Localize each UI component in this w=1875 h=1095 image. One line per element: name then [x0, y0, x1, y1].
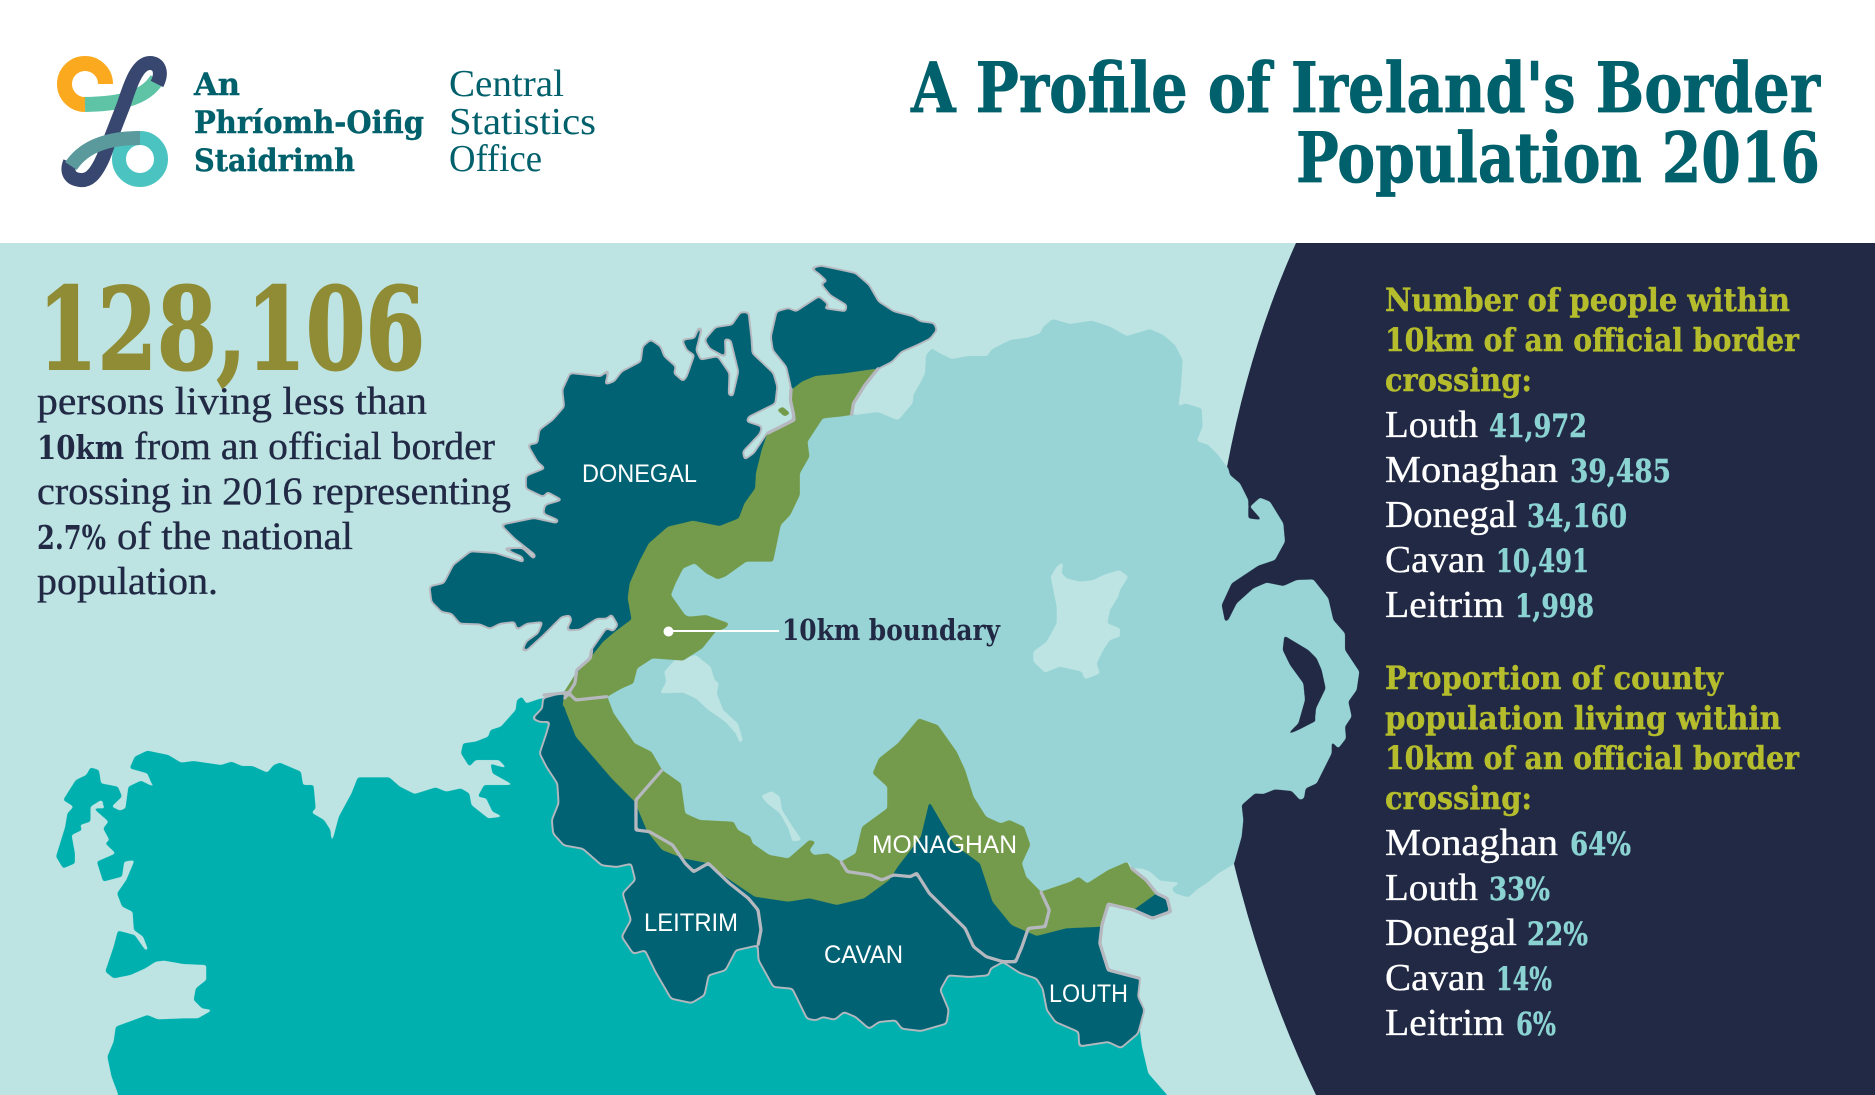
- list: number of people by county: 10,491: [1496, 542, 1589, 580]
- Northern Ireland landmass: [586, 319, 1359, 907]
- list: number of people by county: 41,972: [1489, 407, 1587, 445]
- 10km boundary band: [563, 368, 1157, 936]
- callout: 10km boundary: [664, 613, 1001, 647]
- list: number of people by county: Monaghan: [1385, 449, 1558, 491]
- list: number of people by county: Leitrim: [1385, 584, 1504, 626]
- logo text: English name: Office: [449, 138, 542, 180]
- heading: proportion of county: population living within: [1385, 699, 1781, 737]
- heading: proportion of county: 10km of an official border: [1385, 739, 1800, 777]
- panel: number of people: [1385, 281, 1800, 626]
- stat description: 10km: [37, 428, 124, 467]
- logo symbol: [64, 63, 161, 180]
- title: [910, 48, 1821, 199]
- list: proportion by county: Cavan: [1385, 957, 1485, 999]
- list: proportion by county: Donegal: [1385, 912, 1517, 954]
- heading: proportion of county: Proportion of county: [1385, 659, 1724, 697]
- stat description: from an official border: [134, 425, 495, 468]
- logo text: Irish name: An: [193, 67, 240, 103]
- logo text: English name: Central: [449, 63, 564, 105]
- county label: Monaghan: MONAGHAN: [872, 831, 1017, 859]
- logo text: English name: [449, 63, 596, 180]
- headline stat: 128,106: [38, 263, 425, 396]
- stat description: persons living less than: [37, 380, 427, 423]
- logo text: Irish name: Phríomh-Oifig: [194, 105, 424, 141]
- list: proportion by county: Monaghan: [1385, 822, 1558, 864]
- list: number of people by county: 34,160: [1527, 497, 1627, 535]
- list: number of people by county: Louth: [1385, 404, 1478, 446]
- list: number of people by county: Cavan: [1385, 539, 1485, 581]
- heading: proportion of county: [1385, 659, 1800, 817]
- callout: 10km boundary: 10km boundary: [782, 613, 1001, 647]
- panel: proportion of county: [1385, 659, 1800, 1044]
- county label: Louth: LOUTH: [1049, 980, 1128, 1008]
- list: proportion by county: 14%: [1496, 960, 1552, 998]
- heading: number of people: [1385, 281, 1800, 399]
- Lough Erne lakes: [660, 655, 802, 842]
- heading: number of people: crossing:: [1385, 361, 1532, 399]
- list: number of people by county: [1385, 404, 1671, 626]
- county label: Cavan: CAVAN: [824, 941, 903, 969]
- map: [56, 266, 1359, 1095]
- stat description: crossing in 2016 representing: [37, 470, 511, 513]
- stat description: of the national: [117, 515, 353, 558]
- list: number of people by county: 1,998: [1515, 587, 1594, 625]
- Leitrim, Cavan, Monaghan and Louth counties: [533, 692, 1171, 1048]
- logo text: Irish name: [193, 67, 424, 179]
- heading: proportion of county: crossing:: [1385, 779, 1532, 817]
- coast and county border lines: [543, 368, 1171, 978]
- list: number of people by county: 39,485: [1570, 452, 1671, 490]
- Republic of Ireland landmass: [56, 697, 1174, 1095]
- county label: Leitrim: LEITRIM: [644, 909, 738, 937]
- list: proportion by county: Louth: [1385, 867, 1478, 909]
- list: proportion by county: 33%: [1489, 870, 1550, 908]
- Lough Neagh: [1033, 562, 1128, 679]
- list: proportion by county: [1385, 822, 1631, 1044]
- logo: [64, 63, 596, 180]
- Donegal county: [430, 266, 937, 698]
- list: proportion by county: 6%: [1516, 1005, 1556, 1043]
- stat description: population.: [37, 560, 218, 603]
- stat description: [37, 380, 511, 603]
- Strangford Lough: [1283, 636, 1326, 735]
- navy side panel: [1210, 243, 1875, 1095]
- list: proportion by county: Leitrim: [1385, 1002, 1504, 1044]
- stat description: 2.7%: [37, 518, 106, 557]
- heading: number of people: Number of people within: [1385, 281, 1790, 319]
- sea background: [0, 243, 1875, 1095]
- list: proportion by county: 22%: [1527, 915, 1588, 953]
- list: number of people by county: Donegal: [1385, 494, 1517, 536]
- heading: number of people: 10km of an official border: [1385, 321, 1800, 359]
- logo text: Irish name: Staidrimh: [194, 143, 355, 179]
- county label: Donegal: DONEGAL: [582, 460, 697, 488]
- list: proportion by county: 64%: [1570, 825, 1631, 863]
- logo text: English name: Statistics: [449, 101, 596, 143]
